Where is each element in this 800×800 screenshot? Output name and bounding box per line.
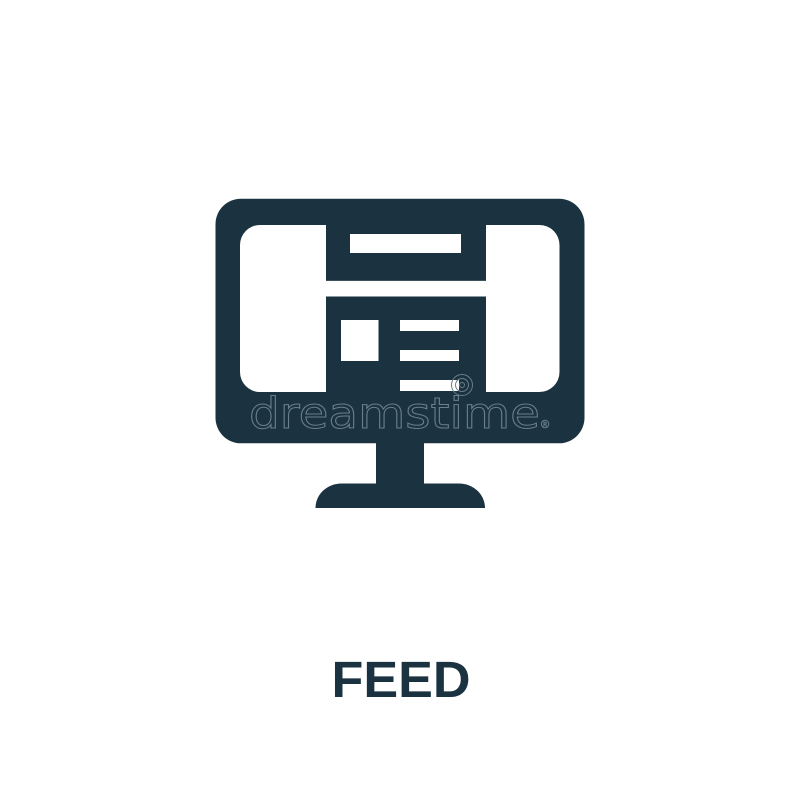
feed header block bbox=[326, 225, 486, 281]
monitor stand bbox=[316, 442, 485, 508]
watermark bbox=[249, 374, 549, 439]
watermark registered mark: ® bbox=[541, 419, 549, 431]
watermark text: dreamstime bbox=[249, 389, 540, 439]
feed post thumbnail bbox=[341, 320, 378, 361]
monitor body with screen cut out bbox=[216, 199, 584, 443]
feed post text lines bbox=[400, 320, 459, 391]
icon: desktop monitor showing feed bbox=[216, 199, 584, 508]
watermark spiral bbox=[452, 374, 472, 396]
title: FEED bbox=[332, 651, 470, 708]
